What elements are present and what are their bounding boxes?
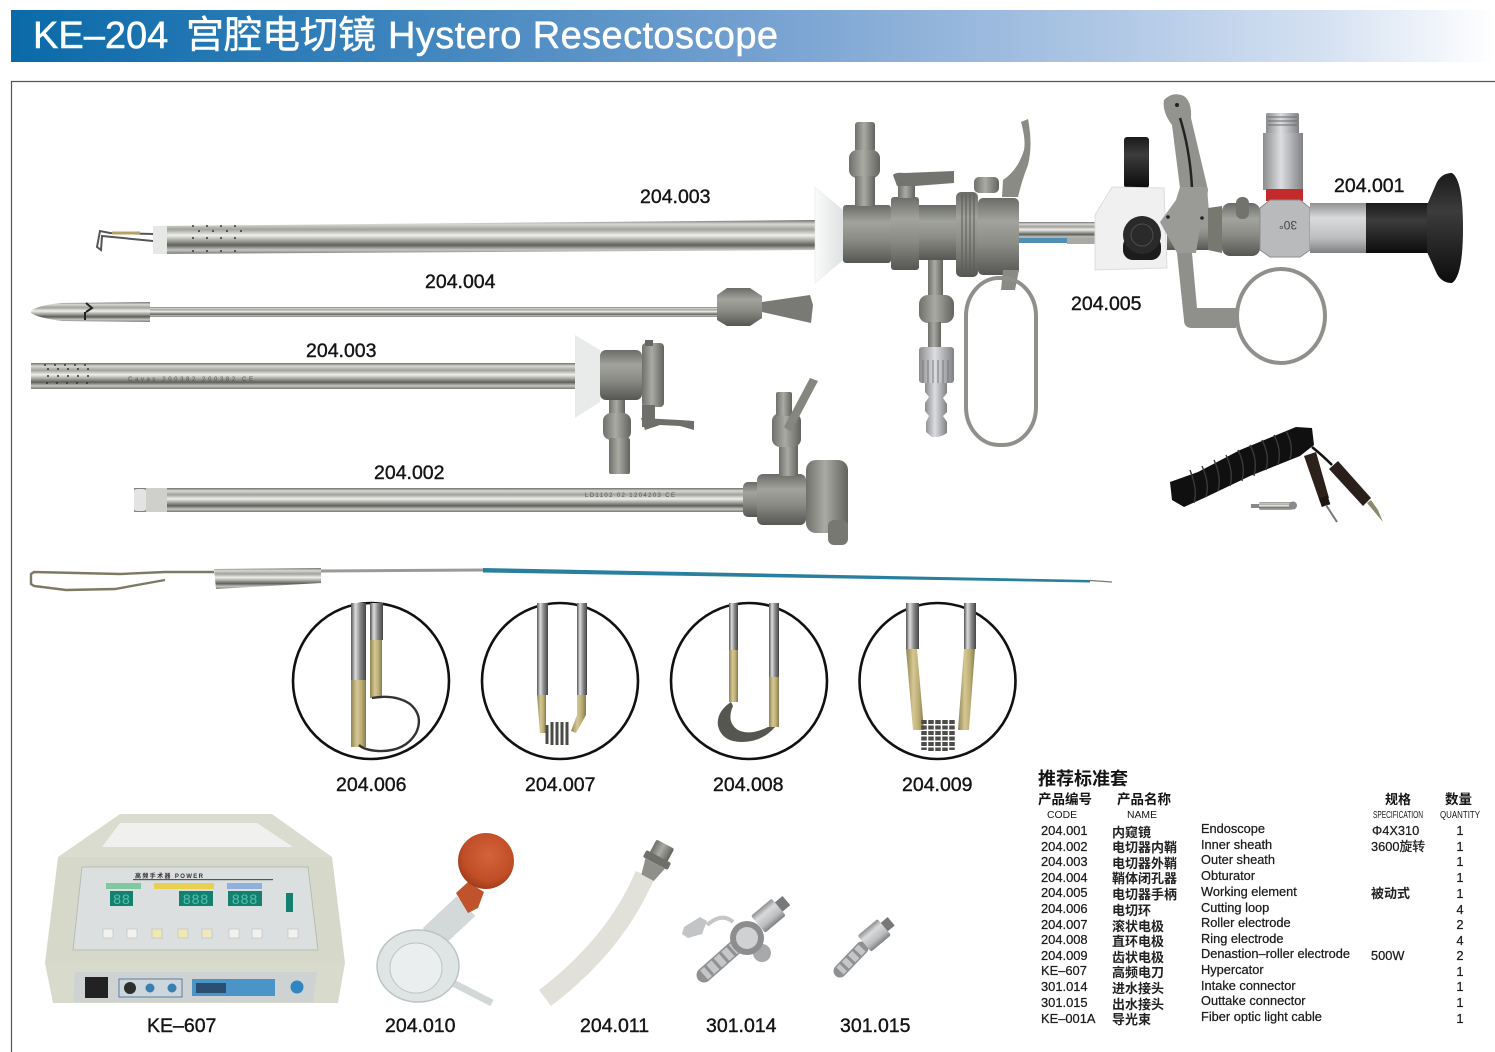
label 204.002: 204.002 — [374, 462, 444, 484]
metal connector — [635, 838, 678, 884]
english names: Roller electrode — [1201, 915, 1291, 930]
label 204.011: 204.011 — [580, 1015, 649, 1037]
product codes: 301.014 — [1041, 979, 1088, 994]
english names: Inner sheath — [1201, 837, 1272, 852]
label 204.008: 204.008 — [713, 774, 784, 796]
upper front — [45, 857, 345, 963]
detail circle 204.008: ring electrode — [671, 603, 827, 759]
display digits — [113, 891, 258, 907]
display digits: 888 — [183, 891, 209, 907]
rubber bulb — [458, 833, 514, 889]
label 301.015: 301.015 — [840, 1015, 911, 1037]
column headers: SPECIFICATION — [1373, 810, 1423, 821]
english names: Working element — [1201, 884, 1297, 899]
probe two — [1312, 447, 1383, 522]
detail circle 204.007: roller electrode — [482, 603, 638, 759]
product codes: 204.001 — [1041, 823, 1088, 838]
english names: Ring electrode — [1201, 931, 1284, 946]
cable coil — [1170, 427, 1314, 507]
quantities: 1 — [1456, 886, 1464, 901]
white block — [1095, 187, 1167, 270]
rubber collar — [456, 882, 484, 913]
probe one — [1304, 452, 1337, 522]
quantities: 1 — [1456, 1011, 1464, 1026]
glass spout — [453, 983, 492, 1003]
label 301.014: 301.014 — [706, 1015, 777, 1037]
label 204.003 top: 204.003 — [640, 186, 710, 208]
english names: Hypercator — [1201, 962, 1264, 977]
chinese names: 齿状电极 — [1112, 950, 1164, 965]
barb — [704, 945, 738, 975]
black round knob — [1123, 216, 1161, 260]
black light post — [1124, 137, 1149, 188]
loop wire — [359, 697, 419, 751]
part: silicone tube 204.011 — [545, 838, 678, 998]
label 204.005: 204.005 — [1071, 293, 1142, 315]
barb ridges — [840, 948, 862, 971]
instrument: assembled resectoscope — [97, 94, 1325, 445]
lever — [707, 918, 733, 925]
chinese names: 电切器手柄 — [1112, 887, 1177, 902]
chinese names: 电切环 — [1112, 903, 1151, 918]
display digits: 888 — [232, 891, 258, 907]
product codes: 204.002 — [1041, 839, 1088, 854]
crescent blade — [718, 702, 775, 742]
light post — [1263, 113, 1303, 201]
sheath wires — [906, 603, 976, 730]
column headers: CODE — [1047, 809, 1077, 821]
quantities: 1 — [1456, 870, 1464, 885]
header banner — [11, 10, 1495, 62]
instrument: outer sheath 204.003: Cavas 200382 200382 CE — [128, 377, 253, 383]
english names: Obturator — [1201, 868, 1256, 883]
english names: Outtake connector — [1201, 993, 1306, 1008]
column headers: QUANTITY — [1440, 810, 1480, 821]
oval finger grip — [966, 270, 1036, 445]
quantities: 1 — [1456, 823, 1464, 838]
column headers: NAME — [1127, 809, 1157, 821]
display digits: 88 — [113, 891, 131, 907]
specifications: Φ4X310 — [1372, 823, 1419, 838]
chinese names: 进水接头 — [1112, 981, 1164, 996]
label 204.009: 204.009 — [902, 774, 972, 796]
detail circle 204.009: denaturing roller — [860, 603, 1016, 759]
specifications: 3600旋转 — [1371, 839, 1425, 854]
adapter pin — [1251, 502, 1297, 510]
device: glass bulb 204.010 — [377, 833, 514, 1003]
english names: Denastion–roller electrode — [1201, 946, 1350, 961]
title: Hystero Resectoscope — [388, 15, 778, 57]
specifications: 500W — [1371, 948, 1405, 963]
quantities — [1456, 823, 1464, 1026]
shaft and blue electrode — [1019, 222, 1095, 244]
top inlet valve — [849, 122, 999, 206]
quantities: 1 — [1456, 995, 1464, 1010]
assembled outer sheath tube — [97, 220, 815, 254]
knurled nut — [751, 892, 793, 933]
product codes: 301.015 — [1041, 995, 1088, 1010]
chinese names — [1112, 825, 1177, 1027]
table title: 推荐标准套 — [1038, 769, 1128, 789]
silicone sleeve — [545, 875, 645, 998]
product codes: 204.004 — [1041, 870, 1088, 885]
toothed roller — [924, 720, 952, 751]
panel buttons — [103, 929, 298, 938]
quantities: 2 — [1456, 917, 1464, 932]
power switch — [85, 977, 108, 998]
title: KE–204 — [33, 15, 168, 57]
chinese names: 鞘体闭孔器 — [1112, 871, 1177, 886]
side knob — [753, 944, 771, 962]
sheath wires — [729, 603, 779, 727]
label 204.010: 204.010 — [385, 1015, 456, 1037]
octagonal body — [1260, 200, 1310, 257]
blue socket — [290, 980, 304, 994]
english names — [1201, 821, 1350, 1024]
column headers: 数量 — [1445, 791, 1472, 807]
chinese names: 出水接头 — [1112, 997, 1164, 1012]
panel rule — [133, 879, 273, 880]
glass neck — [432, 906, 466, 938]
eyepiece — [1427, 173, 1463, 283]
label 204.004: 204.004 — [425, 271, 496, 293]
instrument: obturator 204.004 — [31, 288, 813, 326]
product codes: 204.005 — [1041, 885, 1088, 900]
lower outlet valve and barb — [919, 260, 954, 437]
device: KE-607 generator — [45, 814, 345, 1003]
english names: Outer sheath — [1201, 852, 1275, 867]
english names: Endoscope — [1201, 821, 1265, 836]
label KE-607: KE–607 — [147, 1015, 216, 1037]
product codes: 204.008 — [1041, 932, 1088, 947]
instrument: endoscope 204.001 — [1208, 113, 1463, 283]
black barrel — [1366, 203, 1428, 253]
chinese names: 内窥镜 — [1112, 825, 1151, 840]
sheath wires — [351, 603, 383, 747]
detail circle 204.006: cutting loop — [293, 603, 449, 759]
barrel — [1310, 203, 1366, 253]
quantities: 1 — [1456, 979, 1464, 994]
top paper — [102, 823, 293, 847]
table: recommended standard set — [1038, 769, 1480, 1027]
specifications — [1371, 823, 1425, 963]
valve hub — [730, 921, 764, 955]
barb ridges — [704, 945, 738, 975]
chinese names: 高频电刀 — [1112, 965, 1164, 980]
product codes: KE–001A — [1041, 1011, 1096, 1026]
part: connector 301.015 — [840, 913, 898, 971]
glass sphere — [377, 930, 459, 1002]
instrument: inner sheath 204.002: LD1102 02 1204203 CE — [585, 493, 675, 499]
hub face — [736, 927, 758, 949]
chinese names: 电切器外鞘 — [1112, 856, 1177, 871]
label 204.007: 204.007 — [525, 774, 596, 796]
control panel — [73, 867, 318, 950]
quantities: 1 — [1456, 964, 1464, 979]
blue readout — [192, 979, 275, 996]
column headers: 产品名称 — [1117, 791, 1171, 807]
instrument: inner sheath 204.002 — [134, 378, 848, 545]
lower panel — [73, 972, 317, 1002]
angle marking: 30° — [1279, 218, 1297, 232]
product codes: 204.009 — [1041, 948, 1088, 963]
coupling — [1208, 197, 1260, 256]
barb — [840, 948, 862, 971]
english names: Fiber optic light cable — [1201, 1009, 1322, 1024]
panel title: 高频手术器 POWER — [135, 872, 204, 880]
top face — [58, 814, 332, 857]
chinese names: 滚状电极 — [1112, 919, 1164, 934]
round thumb ring — [1237, 269, 1325, 363]
title: 宫腔电切镜 — [186, 15, 376, 57]
digital displays — [110, 891, 293, 912]
product codes: 204.003 — [1041, 854, 1088, 869]
english names: Cutting loop — [1201, 900, 1269, 915]
scissor handle arms — [1160, 94, 1236, 328]
sheath wires — [537, 603, 587, 733]
knurled nut — [858, 913, 898, 952]
label 204.003 middle: 204.003 — [306, 340, 376, 362]
quantities: 2 — [1456, 948, 1464, 963]
metal collar behind arms — [1167, 212, 1222, 250]
product codes: 204.006 — [1041, 901, 1088, 916]
paddle — [682, 917, 707, 938]
instrument: outer sheath 204.003 — [31, 335, 694, 474]
product codes: 204.007 — [1041, 917, 1088, 932]
chinese names: 电切器内鞘 — [1112, 840, 1177, 855]
working element body — [815, 187, 1019, 283]
column headers: 产品编号 — [1038, 791, 1092, 807]
quantities: 1 — [1456, 839, 1464, 854]
trigger lever — [1002, 119, 1030, 197]
instrument: working wire electrode — [31, 568, 1112, 590]
english names: Intake connector — [1201, 978, 1296, 993]
quantities: 4 — [1456, 902, 1464, 917]
column headers — [1038, 791, 1480, 821]
column headers: 规格 — [1385, 792, 1411, 807]
quantities: 4 — [1456, 933, 1464, 948]
connector box — [119, 979, 182, 997]
instrument: electrode cable — [1170, 427, 1383, 522]
label 204.001: 204.001 — [1334, 175, 1404, 197]
colour strips — [106, 883, 262, 889]
roller discs — [547, 722, 567, 745]
lower front — [45, 963, 345, 1003]
chinese names: 直环电极 — [1112, 934, 1164, 949]
label 204.006: 204.006 — [336, 774, 406, 796]
specifications: 被动式 — [1371, 886, 1410, 901]
quantities: 1 — [1456, 854, 1464, 869]
product codes: KE–607 — [1041, 963, 1087, 978]
product codes — [1041, 823, 1096, 1026]
chinese names: 导光束 — [1112, 1012, 1151, 1027]
part: stopcock 301.014 — [682, 892, 793, 975]
